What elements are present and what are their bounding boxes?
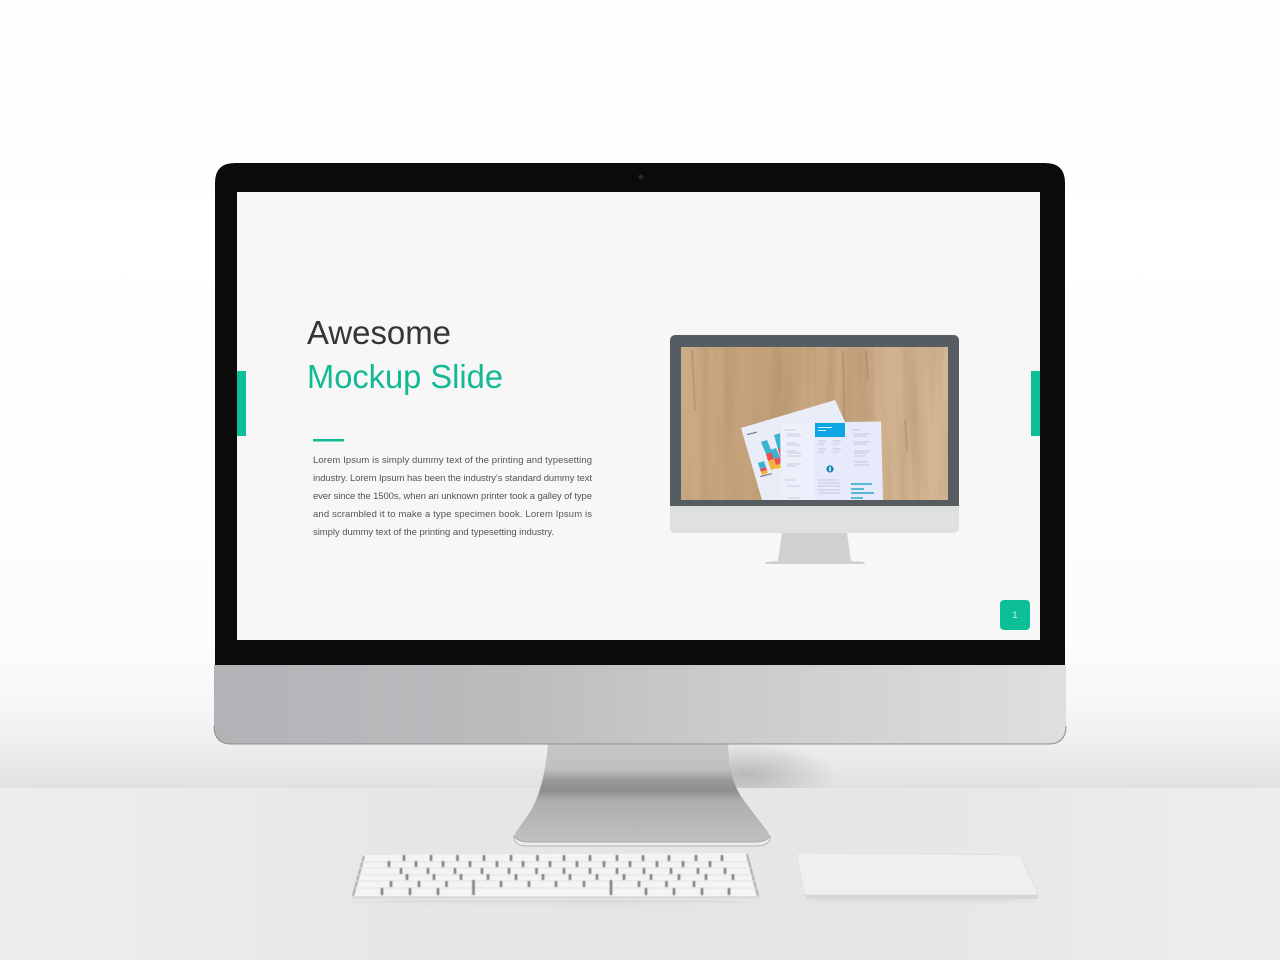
slide title: Mockup Slide xyxy=(307,358,503,395)
keyboard xyxy=(351,853,761,902)
cyan skill bars xyxy=(851,484,874,498)
trackpad top surface xyxy=(797,853,1037,895)
wood photo on small monitor xyxy=(681,347,948,500)
shadow right of stand xyxy=(725,745,835,788)
body paragraph: and scrambled it to make a type specimen book. Lorem Ipsum is xyxy=(313,509,592,520)
key gaps xyxy=(382,855,733,895)
trackpad xyxy=(797,853,1038,901)
body paragraph: simply dummy text of the printing and typesetting industry. xyxy=(313,527,554,538)
small monitor illustration xyxy=(670,335,959,564)
stand base lip xyxy=(514,836,770,846)
blue header block xyxy=(815,423,845,437)
bar chart on document xyxy=(747,432,783,477)
trackpad front lip xyxy=(805,895,1038,899)
front document with columns xyxy=(780,422,883,500)
chin edge xyxy=(214,726,1066,744)
monitor black bezel xyxy=(215,163,1065,666)
body paragraph xyxy=(313,455,592,538)
left green tab xyxy=(237,371,246,436)
small monitor frame xyxy=(670,335,959,506)
slide title: Awesome xyxy=(307,314,451,351)
desk surface xyxy=(0,788,1280,960)
body paragraph: industry. Lorem Ipsum has been the industry's standard dummy text xyxy=(313,473,592,484)
keyboard side edges and lip xyxy=(353,854,758,896)
key row separators xyxy=(354,862,757,888)
page number badge: 1 xyxy=(1012,610,1018,620)
webcam xyxy=(638,174,644,180)
monitor xyxy=(214,163,1066,744)
small monitor stand xyxy=(765,533,865,564)
back tilted document xyxy=(741,400,846,500)
green accent line xyxy=(313,439,344,442)
body paragraph: ever since the 1500s, when an unknown printer took a galley of type xyxy=(313,491,592,502)
body paragraph: Lorem Ipsum is simply dummy text of the printing and typesetting xyxy=(313,455,592,466)
keyboard body xyxy=(352,853,759,900)
slide title xyxy=(307,314,503,395)
right green tab xyxy=(1031,371,1040,436)
monitor stand xyxy=(514,744,770,846)
monitor aluminium chin xyxy=(214,665,1066,744)
small monitor chin xyxy=(670,506,959,533)
page number badge xyxy=(1000,600,1030,630)
slide screen xyxy=(237,192,1040,640)
document text lines xyxy=(785,430,870,498)
blue circle badge xyxy=(826,465,834,473)
